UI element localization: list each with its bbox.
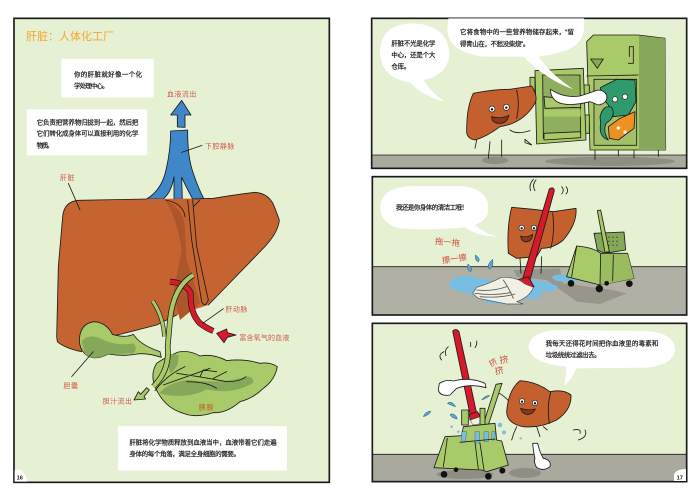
- mop handle: [453, 329, 483, 425]
- text box: processing nutrients: 物质。: [37, 140, 53, 149]
- floor shadows: [482, 157, 675, 166]
- arrow: blood flowing up: [171, 100, 191, 127]
- fridge: [587, 35, 666, 159]
- open fridge door: [530, 68, 589, 144]
- speech bubble: 垃圾统统过滤出去。: [546, 350, 601, 359]
- label: bile out: 胆汁流出: [103, 396, 132, 405]
- mop: [473, 188, 554, 304]
- label: oxygen-rich blood: 富含氧气的血液: [239, 333, 289, 342]
- speech bubble: 我每天还得花时间把你血液里的毒素和: [546, 339, 658, 348]
- speech bubble: [528, 330, 675, 386]
- label: squeeze: 挤: [494, 364, 505, 377]
- label: gallbladder: 胆囊: [63, 381, 78, 390]
- label: squeeze: 挤: [487, 356, 499, 369]
- squeezing bucket: [434, 383, 508, 480]
- wall and floor: [372, 323, 687, 482]
- white leg and foot: [533, 443, 550, 469]
- text box: chemical centre: 学处理中心。: [74, 81, 109, 90]
- label: squeeze: 挤: [499, 353, 509, 365]
- page number 17: 17: [677, 475, 683, 481]
- speech bubble: big warehouse: 中心，还是个大: [391, 50, 436, 59]
- motion lines: [530, 179, 568, 194]
- water drops: [423, 396, 522, 439]
- inferior vena cava: [147, 130, 204, 199]
- page number 16: [15, 470, 27, 482]
- puddle: [449, 276, 558, 304]
- label: gallbladder: [63, 352, 93, 390]
- text box: chemical centre: 你的肝脏就好像一个化: [74, 69, 143, 78]
- liver: [57, 192, 279, 352]
- label: squeeze: [487, 353, 509, 377]
- label: vena cava with leader: 下腔静脉: [205, 141, 234, 150]
- right panel 2: cleaner: [372, 177, 687, 315]
- right panel 1: storehouse: [372, 18, 687, 168]
- wall and floor: [372, 18, 687, 168]
- shadows: [513, 268, 627, 304]
- bile ducts: [153, 275, 193, 387]
- hepatic artery: [170, 282, 213, 331]
- wall and floor: [372, 177, 687, 315]
- speech bubble: storing nutrients: 得青山在，不愁没柴烧”。: [460, 39, 529, 48]
- text box: blood carries chemicals: [118, 426, 287, 471]
- label: mop and wipe: 擦一擦: [441, 252, 467, 265]
- speech bubble: big warehouse: 肝脏不光是化学: [391, 38, 436, 47]
- arrow: bile out: [134, 388, 149, 400]
- speech bubble: [380, 186, 497, 237]
- floor shadows: [437, 468, 541, 479]
- label: mop and wipe: [435, 236, 467, 265]
- page number 17: [674, 469, 686, 481]
- speech bubble: storing nutrients: 它将食物中的一些营养物储存起来，“留: [460, 27, 574, 36]
- text box: blood carries chemicals: 身体的每个角落，满足全身细胞的需要。: [129, 449, 240, 458]
- label: vena cava with leader: [182, 141, 234, 152]
- label: hepatic artery: 肝动脉: [225, 305, 247, 314]
- pancreas: [153, 351, 277, 416]
- speech bubble: big warehouse: 仓库。: [391, 62, 410, 71]
- white arm reaching: [551, 89, 607, 105]
- gallbladder: [79, 322, 161, 358]
- speech bubble: big warehouse: [380, 23, 449, 102]
- right panel 3: filtering: [372, 323, 687, 482]
- speech bubble: storing nutrients: [447, 18, 584, 89]
- text box: blood carries chemicals: 肝脏将化学物质释放到血液当中，血液带着它们走遍: [129, 437, 277, 446]
- label: mop and wipe: 拖一拖: [435, 236, 460, 248]
- white arm pressing: [438, 379, 486, 395]
- label: hepatic artery: [203, 305, 247, 323]
- mop bucket: [567, 210, 634, 292]
- panel background: [14, 18, 329, 482]
- text box: chemical centre: [61, 59, 154, 97]
- title: 肝脏：人体化工厂: [26, 29, 114, 43]
- liver character: [499, 381, 571, 440]
- left page: liver chemical factory: [14, 18, 329, 482]
- text box: processing nutrients: 它们转化成身体可以直接利用的化学: [37, 129, 139, 138]
- label: blood out: 血液流出: [167, 89, 196, 98]
- water drops: [467, 255, 493, 272]
- speech bubble: 我还是你身体的清洁工哦！: [396, 202, 468, 211]
- liver character: [508, 207, 576, 273]
- vegetables in the fridge: [600, 79, 636, 140]
- label: pancreas: 胰腺: [199, 402, 213, 411]
- text box: processing nutrients: 它负责把营养物归拢到一起，然后把: [37, 117, 139, 126]
- motion lines: [440, 341, 586, 440]
- arrow: oxygen-rich blood: [217, 329, 236, 343]
- page number 16: 16: [17, 476, 23, 482]
- label: liver: [60, 173, 80, 210]
- text box: processing nutrients: [27, 109, 147, 155]
- label: liver: 肝脏: [60, 173, 75, 182]
- liver character: [467, 86, 536, 158]
